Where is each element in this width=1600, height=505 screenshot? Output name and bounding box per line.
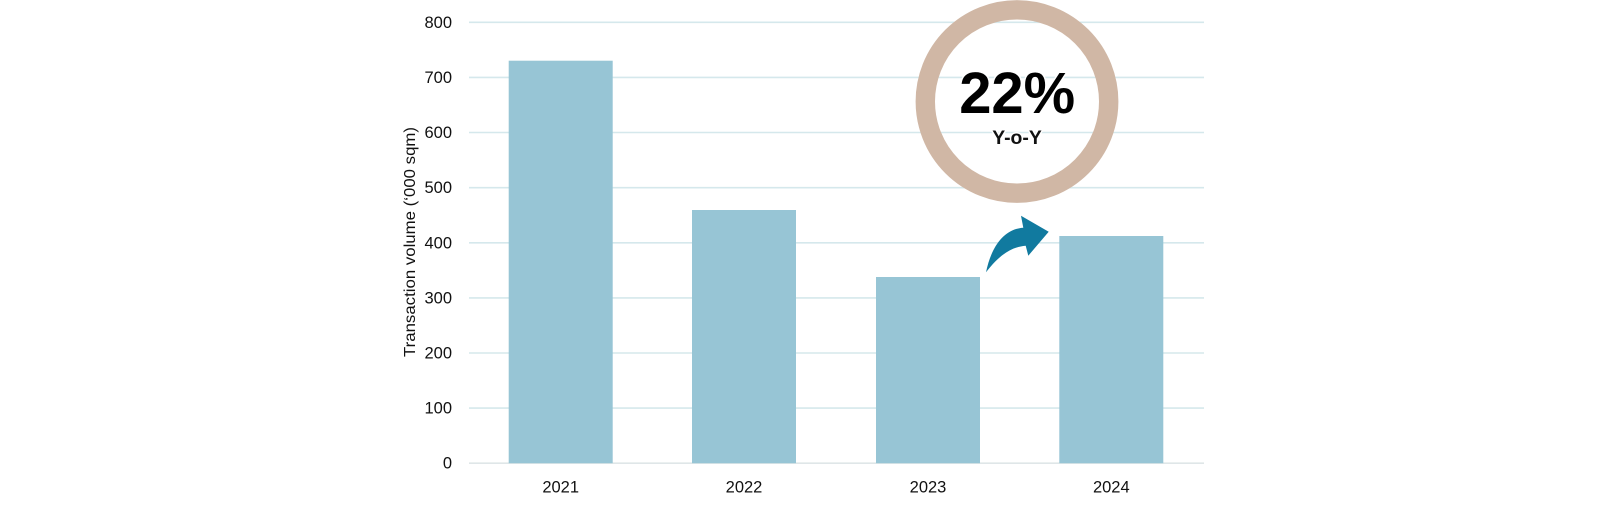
bar: 2021 bbox=[509, 61, 613, 463]
icon: curved growth arrow bbox=[986, 216, 1049, 272]
y axis tick labels: 200 bbox=[424, 344, 452, 362]
bar: 2024 bbox=[1059, 236, 1163, 463]
y axis tick labels: 500 bbox=[424, 179, 452, 197]
x axis labels: 2024 bbox=[1093, 479, 1130, 497]
y axis tick labels: 700 bbox=[424, 69, 452, 87]
bars bbox=[509, 61, 1163, 463]
bar: 2022 bbox=[692, 210, 796, 463]
x axis labels bbox=[542, 479, 1130, 497]
callout: 22% year-on-year ring bbox=[925, 10, 1109, 193]
y axis tick labels: 300 bbox=[424, 289, 452, 307]
callout value: 22% bbox=[959, 61, 1075, 126]
x axis labels: 2023 bbox=[910, 479, 946, 497]
callout label: Y-o-Y bbox=[992, 128, 1042, 149]
y axis tick labels: 400 bbox=[424, 234, 452, 252]
y axis tick labels: 800 bbox=[424, 14, 452, 32]
y axis tick labels: 600 bbox=[424, 124, 452, 142]
bar: 2023 bbox=[876, 277, 980, 463]
y axis tick labels: 100 bbox=[424, 400, 452, 418]
y axis title: Transaction volume (‘000 sqm) bbox=[402, 127, 419, 357]
y axis tick labels bbox=[424, 14, 452, 473]
x axis labels: 2021 bbox=[542, 479, 579, 497]
y axis tick labels: 0 bbox=[443, 455, 452, 473]
x axis labels: 2022 bbox=[726, 479, 762, 497]
